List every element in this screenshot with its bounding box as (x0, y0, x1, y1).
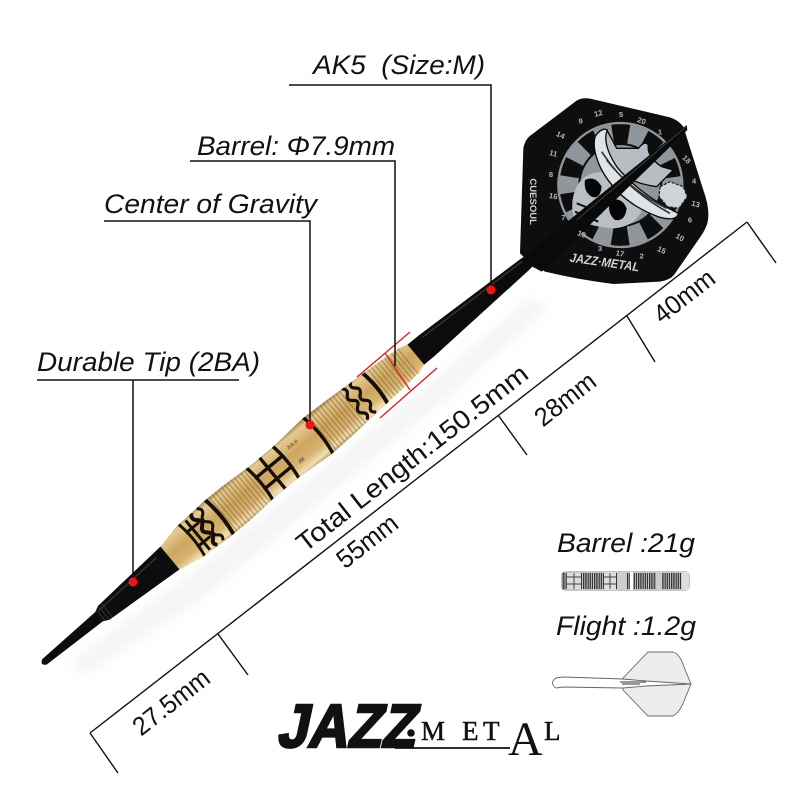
dartboard numbers: 12 (593, 108, 604, 119)
flight weight label: Flight :1.2g (556, 611, 696, 641)
callout: AK5 size M: AK5 (Size:M) (311, 50, 485, 80)
engraved band (286, 440, 305, 464)
dartboard numbers (548, 108, 701, 260)
dimension lines (90, 222, 776, 773)
dartboard numbers: 3 (598, 244, 602, 253)
engraved band: JM (297, 456, 306, 465)
barrel (160, 344, 425, 570)
rear grip pattern (340, 371, 390, 422)
ring (303, 416, 335, 454)
dimension: 40mm: 40mm (647, 263, 721, 329)
dartboard numbers: 19 (576, 228, 587, 240)
dartboard numbers: 7 (561, 213, 565, 222)
callout: AK5 size M (289, 50, 496, 294)
dartboard numbers: 11 (548, 148, 559, 159)
middle grip pattern (245, 444, 301, 501)
dart (42, 257, 532, 665)
dartboard ring (558, 123, 682, 247)
logo: Jazz Metal: E (462, 716, 478, 746)
logo: Jazz Metal (273, 693, 560, 766)
dartboard numbers: 2 (640, 251, 644, 260)
dimension: 28mm: 28mm (528, 366, 602, 432)
soft shadow under dart (70, 298, 548, 674)
dartboard numbers: 14 (555, 129, 567, 141)
dimension: 27.5mm: 27.5mm (126, 662, 216, 742)
logo: Jazz Metal: A (508, 713, 543, 766)
dartboard numbers: 13 (690, 199, 701, 210)
dartboard numbers: 4 (692, 177, 697, 186)
dartboard numbers: 5 (619, 110, 624, 119)
engraved band: JUL® (285, 437, 300, 451)
barrel diameter marker (357, 332, 437, 418)
dartboard numbers: 20 (636, 115, 647, 126)
dartboard numbers: 16 (548, 191, 558, 201)
callout: barrel diameter (190, 131, 395, 366)
dartboard numbers: 18 (680, 153, 693, 166)
dimension: 55mm: 55mm (330, 508, 404, 574)
flight bottom brand: JAZZ·METAL (569, 251, 640, 274)
logo: Jazz Metal: T (483, 716, 500, 746)
dartboard numbers: 1 (658, 127, 663, 136)
dartboard numbers: 9 (579, 116, 583, 125)
dart tip (33, 545, 181, 675)
flight (520, 98, 708, 284)
dartboard numbers: 6 (688, 216, 692, 225)
icon: flight and shaft outline (552, 652, 691, 716)
callout: center of gravity (104, 189, 319, 430)
icon: barrel outline (562, 572, 689, 590)
dartboard numbers: 8 (549, 170, 554, 179)
barrel weight label: Barrel :21g (557, 528, 695, 558)
dartboard numbers: 15 (656, 244, 668, 256)
logo: Jazz Metal: JAZZ (273, 693, 426, 761)
front grip pattern (177, 498, 236, 558)
skull with hat artwork (572, 129, 687, 228)
flight spine (520, 125, 687, 272)
callout: center of gravity: Center of Gravity (104, 189, 319, 219)
logo: Jazz Metal: M (421, 716, 445, 746)
callout: durable tip (37, 347, 260, 586)
callout: durable tip: Durable Tip (2BA) (37, 347, 260, 377)
dartboard numbers: 10 (674, 231, 686, 244)
shaft (408, 248, 540, 365)
flight outline (520, 98, 708, 284)
dimension: total length: Total Length:150.5mm (290, 358, 534, 558)
flight side brand: CUESOUL (528, 178, 538, 226)
dartboard numbers: 17 (615, 248, 625, 259)
callout: barrel diameter: Barrel: Φ7.9mm (197, 131, 395, 161)
logo: Jazz Metal: L (544, 716, 560, 746)
